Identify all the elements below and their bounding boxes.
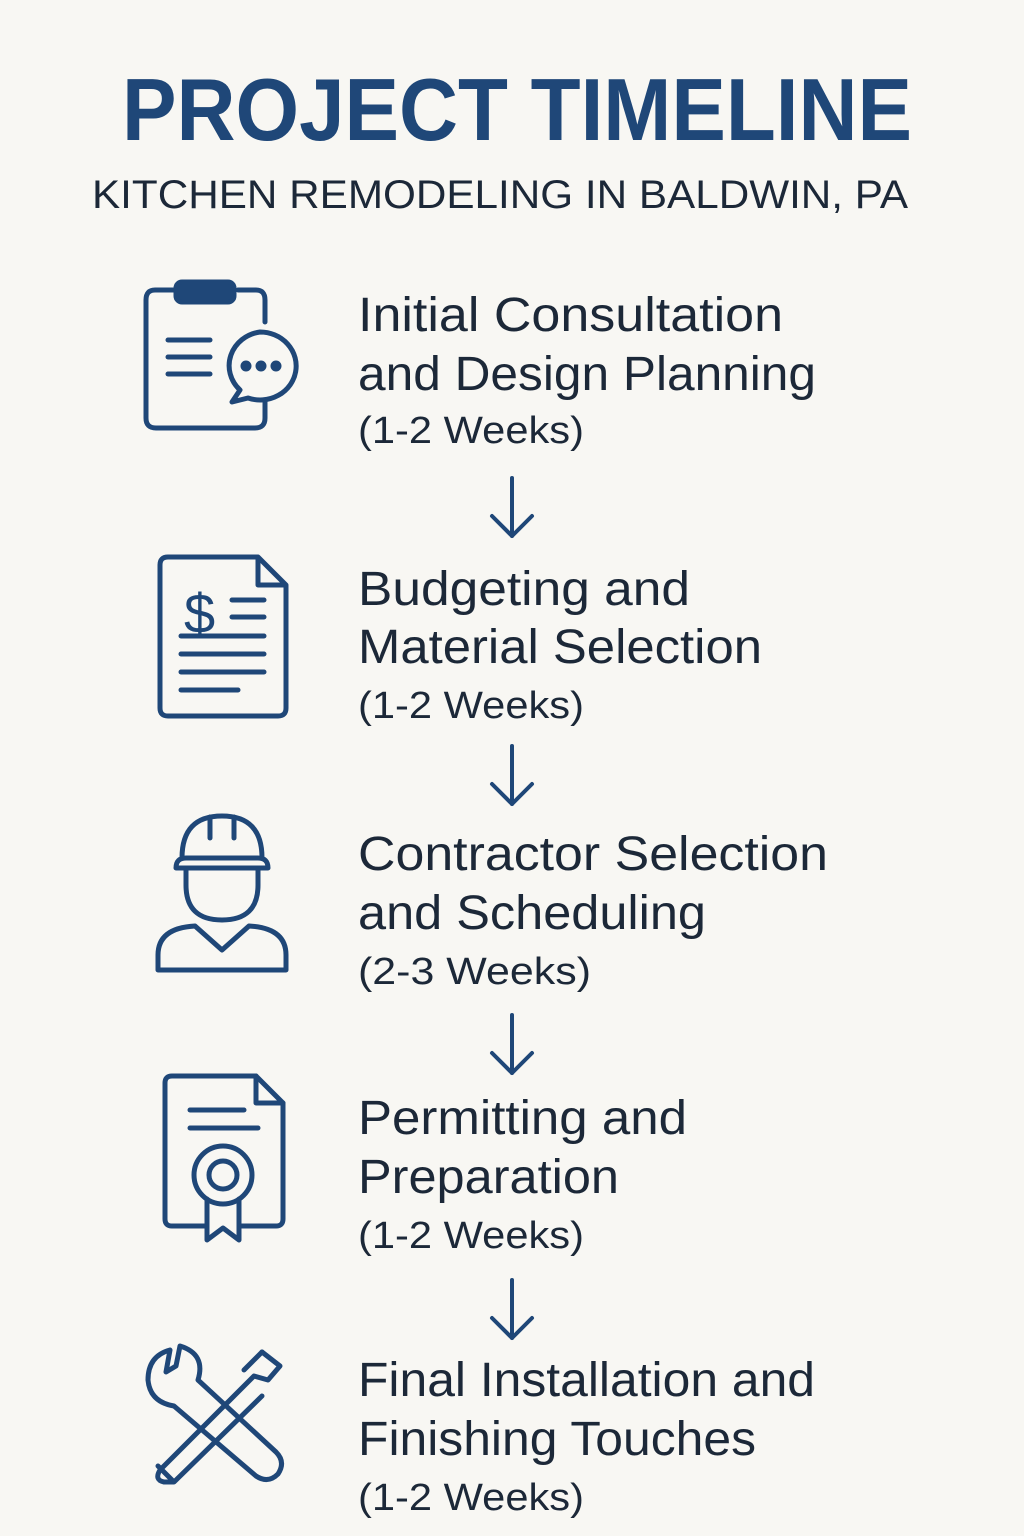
step 3 text: and Scheduling — [358, 887, 706, 940]
step 5 text: Final Installation and — [358, 1354, 815, 1407]
step 5 text — [358, 1354, 815, 1519]
step 1 text — [358, 289, 816, 452]
icon: certificate document — [165, 1076, 283, 1240]
step 4 text: Preparation — [358, 1151, 619, 1204]
step 2 text: Material Selection — [358, 621, 762, 674]
step 4 text: Permitting and — [358, 1092, 687, 1145]
step 2 text: Budgeting and — [358, 563, 690, 616]
step 5 text: Finishing Touches — [358, 1413, 756, 1466]
icon: clipboard with chat — [146, 282, 296, 428]
arrow 3 — [492, 1015, 532, 1073]
arrow 1 — [492, 478, 532, 536]
icon: wrench and screwdriver — [148, 1346, 282, 1482]
step 1 text: (1-2 Weeks) — [358, 410, 584, 452]
step 2 text: (1-2 Weeks) — [358, 685, 584, 727]
step 4 text — [358, 1092, 687, 1257]
step 1 text: and Design Planning — [358, 348, 816, 401]
icon: invoice document — [160, 557, 286, 716]
icon: invoice document: $ — [184, 582, 215, 645]
subtitle: KITCHEN REMODELING IN BALDWIN, PA — [92, 173, 908, 217]
step 5 text: (1-2 Weeks) — [358, 1477, 584, 1519]
step 1 text: Initial Consultation — [358, 289, 783, 342]
step 2 text — [358, 563, 762, 727]
step 3 text: Contractor Selection — [358, 828, 828, 881]
title: PROJECT TIMELINE — [122, 60, 912, 159]
icon: worker with helmet — [158, 816, 286, 970]
step 3 text — [358, 828, 828, 993]
step 3 text: (2-3 Weeks) — [358, 951, 591, 993]
arrow 2 — [492, 746, 532, 804]
step 4 text: (1-2 Weeks) — [358, 1215, 584, 1257]
arrow 4 — [492, 1280, 532, 1338]
